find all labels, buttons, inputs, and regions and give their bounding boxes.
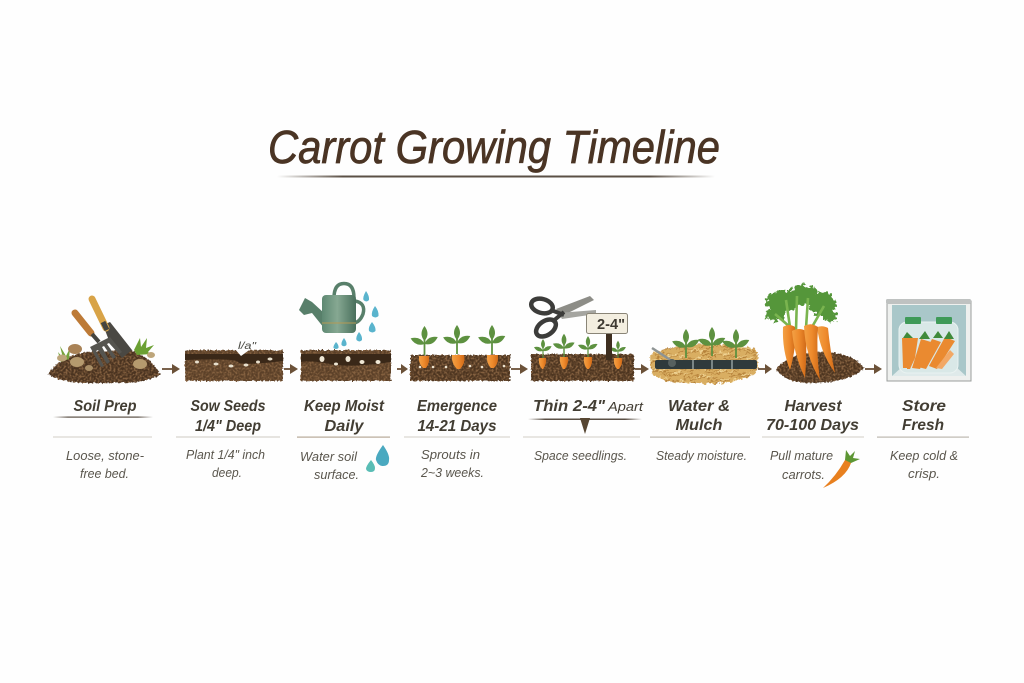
label: emergence: Emergence <box>417 398 497 415</box>
label: soil prep: Soil Prep <box>74 398 136 415</box>
label: water and mulch: Mulch <box>676 417 722 434</box>
step 4: emergence illustration <box>409 325 510 381</box>
arrow 4 <box>511 364 528 374</box>
icon: water drops <box>366 445 389 472</box>
label: store fresh: Fresh <box>902 417 944 434</box>
step 5: thin seedlings illustration <box>530 296 634 381</box>
step 7: harvest illustration <box>766 285 864 383</box>
arrow 6 <box>758 364 772 374</box>
label: store fresh: crisp. <box>908 466 940 481</box>
label: emergence: 14-21 Days <box>418 418 497 435</box>
label: harvest <box>762 398 864 488</box>
label: soil prep <box>53 398 153 481</box>
label: keep moist: Keep Moist <box>304 398 385 415</box>
step 1: soil prep illustration <box>48 299 160 383</box>
label: water and mulch: Steady moisture. <box>656 448 747 463</box>
icon: scissors <box>530 296 596 340</box>
label: soil prep: free bed. <box>80 466 129 481</box>
water drops <box>333 291 379 349</box>
label: harvest: Pull mature <box>770 448 833 463</box>
label: sow seeds: Plant 1/4" inch <box>186 447 265 462</box>
label: keep moist: Water soil <box>300 449 358 464</box>
label: emergence: 2~3 weeks. <box>420 465 484 480</box>
label: keep moist: surface. <box>314 467 359 482</box>
label: sow seeds: 1/4" Deep <box>195 418 261 435</box>
label: thin apart: Space seedlings. <box>534 448 627 463</box>
label: thin apart: Apart <box>607 399 645 414</box>
label: water and mulch <box>650 398 750 463</box>
drip hose <box>652 348 757 369</box>
title: Carrot Growing Timeline <box>268 121 720 173</box>
step 2: sow seeds illustration: l/a" <box>238 341 257 352</box>
step 2: sow seeds illustration <box>185 341 283 381</box>
arrow 7 <box>865 364 882 374</box>
label: emergence: Sprouts in <box>421 447 480 462</box>
label: water and mulch: Water & <box>668 398 730 415</box>
label: store fresh <box>877 398 969 481</box>
label: emergence <box>404 398 510 480</box>
label: harvest: Harvest <box>784 398 842 415</box>
label: harvest: carrots. <box>782 467 825 482</box>
label: store fresh: Keep cold & <box>890 448 958 463</box>
label: keep moist <box>297 398 390 482</box>
label: sow seeds: deep. <box>212 465 242 480</box>
label: thin apart <box>523 398 645 463</box>
step 8: store fresh illustration <box>886 299 971 381</box>
icon: carrot <box>823 450 860 488</box>
label: harvest: 70-100 Days <box>766 417 859 434</box>
label: sow seeds: Sow Seeds <box>190 398 266 415</box>
icon: watering can <box>299 284 364 333</box>
step 3: keep moist illustration <box>299 284 391 381</box>
arrow 2 <box>284 364 298 374</box>
label: store fresh: Store <box>902 398 946 415</box>
step 6: water and mulch illustration <box>650 327 758 384</box>
label: sow seeds <box>176 398 280 480</box>
label: soil prep: Loose, stone- <box>66 448 145 463</box>
sign: 2-4 inches: 2-4" <box>597 316 625 333</box>
storage jar <box>899 317 958 373</box>
arrow 3 <box>397 364 408 374</box>
label: thin apart: Thin 2-4" <box>533 398 606 415</box>
arrow 5 <box>635 364 649 374</box>
arrow 1 <box>162 364 180 374</box>
label: keep moist: Daily <box>324 418 365 435</box>
refrigerator box <box>886 299 971 381</box>
